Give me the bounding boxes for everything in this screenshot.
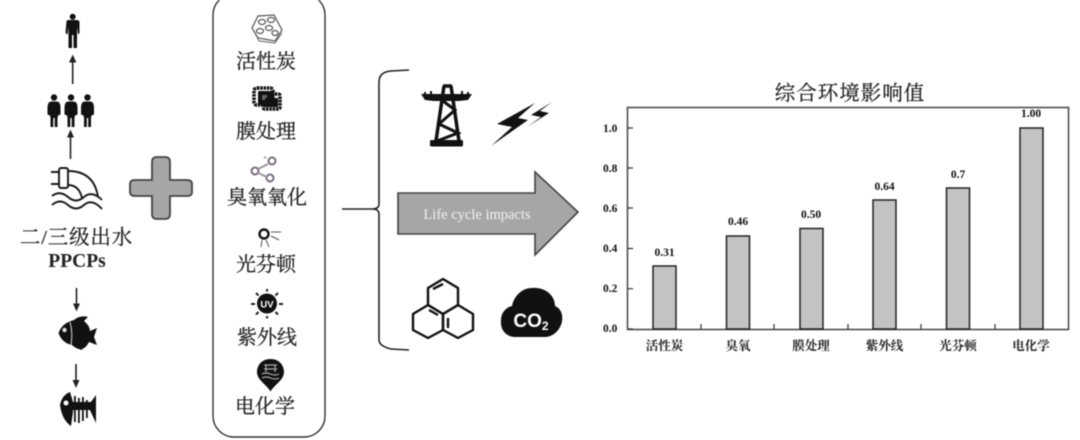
value labels: 0.7 bbox=[951, 169, 965, 181]
category labels bbox=[646, 338, 1050, 353]
icon: CO2 cloud: 2 bbox=[542, 319, 549, 333]
category labels: 膜处理 bbox=[792, 338, 830, 353]
y axis: 0.2 bbox=[603, 283, 618, 295]
arrow: up to people bbox=[67, 130, 74, 159]
text: electrochemical: 电化学 bbox=[235, 395, 295, 418]
arrow: life cycle impacts bbox=[398, 172, 578, 255]
value labels: 0.31 bbox=[654, 247, 675, 259]
y axis: 0.8 bbox=[603, 163, 618, 175]
icon: photo-Fenton bbox=[260, 230, 281, 247]
category labels: 臭氧 bbox=[725, 338, 751, 353]
category labels: 活性炭 bbox=[646, 338, 684, 353]
value labels: 0.46 bbox=[728, 216, 748, 228]
y axis: 1.0 bbox=[603, 123, 618, 135]
plot frame bbox=[628, 108, 1068, 330]
icon: ozone molecules bbox=[252, 157, 276, 182]
panel: exposure pathway bbox=[20, 14, 133, 426]
category labels: 紫外线 bbox=[866, 338, 904, 353]
icon: polycyclic aromatic bbox=[413, 279, 473, 338]
arrow: up to person bbox=[69, 54, 76, 84]
text: ozone: 臭氧氧化 bbox=[227, 186, 307, 209]
icon: fish bone bbox=[60, 392, 96, 426]
value labels: 1.00 bbox=[1021, 108, 1041, 120]
icon: CO2 cloud: CO bbox=[513, 311, 542, 332]
y axis: 0.0 bbox=[603, 323, 618, 335]
icon: pylon bbox=[421, 86, 472, 146]
arrow: down to fish bone bbox=[72, 364, 80, 388]
text: PPCPs: PPCPs bbox=[48, 251, 106, 272]
category labels: 电化学 bbox=[1012, 338, 1050, 353]
value labels: 0.64 bbox=[874, 181, 895, 193]
icon: activated carbon bbox=[252, 15, 282, 43]
y axis: 0.4 bbox=[603, 243, 618, 255]
icon: fish bbox=[58, 316, 97, 350]
text: photo-Fenton: 光芬顿 bbox=[236, 253, 297, 276]
text: effluent label: 二/三级出水 bbox=[20, 226, 133, 249]
panel outline bbox=[213, 0, 325, 437]
y axis bbox=[603, 123, 995, 335]
icon: electrochemical bbox=[257, 359, 284, 392]
icon: CO2 cloud bbox=[501, 288, 562, 337]
chart title: 综合环境影响值 bbox=[775, 82, 925, 105]
text: membrane: 膜处理 bbox=[236, 120, 296, 143]
icon: UV bbox=[251, 289, 283, 318]
icon: effluent pipe bbox=[51, 168, 102, 209]
text: arrow label: Life cycle impacts bbox=[423, 207, 531, 223]
icon: UV: UV bbox=[260, 300, 274, 310]
icon: plus bbox=[130, 157, 192, 219]
text: UV: 紫外线 bbox=[237, 326, 297, 349]
icon: single person bbox=[66, 14, 80, 48]
brace bbox=[342, 70, 409, 350]
icon: membrane bbox=[254, 88, 280, 109]
value labels bbox=[654, 108, 1041, 259]
chart: composite environmental impact bbox=[603, 82, 1068, 353]
category labels: 光芬顿 bbox=[939, 338, 978, 353]
panel: treatment technologies bbox=[213, 0, 325, 437]
value labels: 0.50 bbox=[801, 209, 821, 221]
y axis: 0.6 bbox=[603, 203, 618, 215]
arrow: down to fish bbox=[73, 288, 80, 312]
icon: lightning bbox=[491, 102, 552, 146]
text: activated carbon: 活性炭 bbox=[236, 50, 296, 73]
bars bbox=[653, 128, 1043, 329]
icon: three people bbox=[48, 94, 94, 127]
